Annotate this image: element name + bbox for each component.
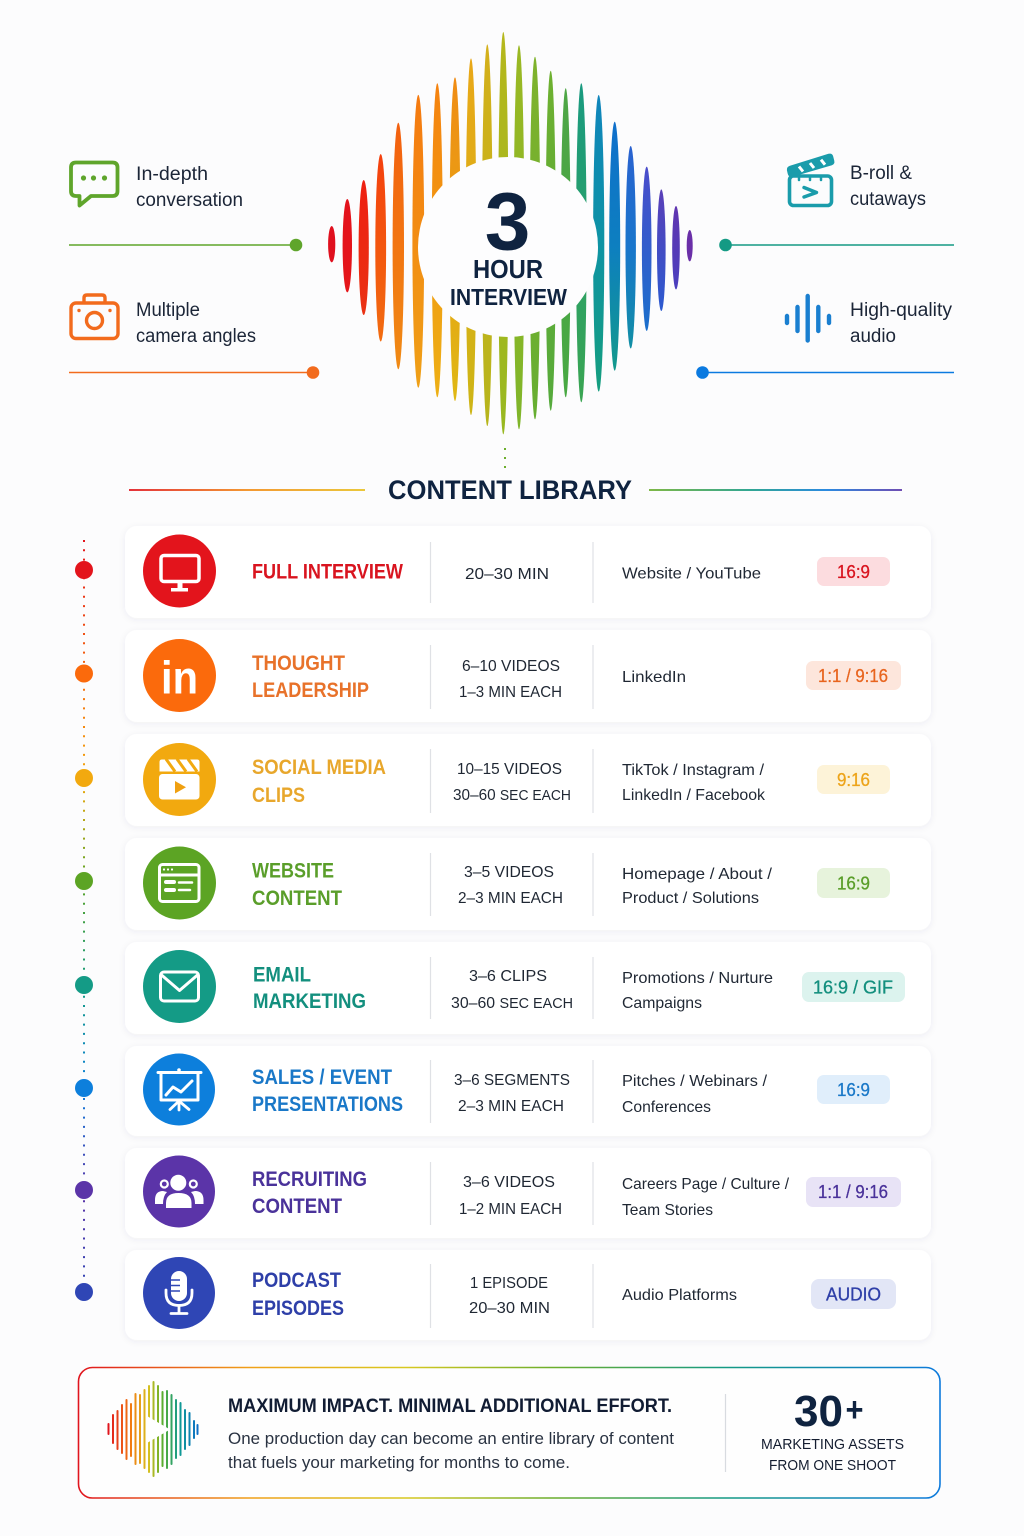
panel: thought leadership — [125, 630, 931, 722]
callout heading: MAXIMUM IMPACT. MINIMAL ADDITIONAL EFFORT. — [228, 1396, 672, 1417]
platforms: Homepage / About / — [622, 866, 773, 883]
ratio pill — [817, 765, 890, 794]
platforms — [622, 1176, 790, 1219]
duration: 30–60 SEC EACH — [451, 995, 573, 1012]
stat: 30+ marketing assets — [761, 1387, 904, 1474]
platforms — [622, 1073, 768, 1116]
icon: audio bars — [787, 296, 829, 340]
ratio pill — [811, 1279, 896, 1309]
duration — [453, 761, 571, 804]
icon: envelope — [143, 950, 216, 1023]
label HOUR: HOUR — [473, 256, 543, 284]
heading: content library: CONTENT LIBRARY — [388, 475, 632, 505]
feature: in-depth conversation — [69, 162, 302, 251]
ratio pill: 9:16 — [837, 770, 870, 790]
ratio pill — [806, 661, 901, 690]
icon: team — [143, 1156, 215, 1228]
platforms — [622, 762, 766, 804]
ratio pill: 16:9 — [837, 1080, 870, 1100]
platforms: LinkedIn — [622, 669, 686, 686]
title — [252, 1168, 367, 1218]
ratio pill — [802, 972, 905, 1002]
platforms: Audio Platforms — [622, 1287, 737, 1304]
panel: sales and event presentations — [125, 1046, 931, 1136]
icon: linkedin: in — [161, 652, 198, 704]
title: THOUGHT — [252, 652, 345, 675]
title: SOCIAL MEDIA — [252, 756, 386, 779]
duration: 30–60 SEC EACH — [453, 787, 571, 804]
ratio pill — [806, 1177, 901, 1207]
ratio pill: 16:9 — [837, 874, 870, 894]
ratio pill: AUDIO — [826, 1284, 881, 1304]
icon: clapper play — [143, 743, 216, 816]
callout body text — [228, 1429, 674, 1472]
icon: monitor — [143, 534, 216, 608]
title: LEADERSHIP — [252, 679, 369, 702]
central waveform with 3 hour interview badge — [328, 32, 693, 434]
text: b-roll and cutaways: cutaways — [850, 189, 926, 210]
duration: 1 EPISODE — [470, 1275, 548, 1292]
title: RECRUITING — [252, 1168, 367, 1191]
panel: website content — [125, 838, 931, 930]
text: in-depth conversation — [136, 164, 243, 211]
ratio pill: 1:1 / 9:16 — [818, 1182, 888, 1202]
connector line orange — [69, 366, 319, 379]
big number 3: 3 — [485, 176, 530, 268]
panel: podcast episodes — [125, 1250, 931, 1340]
title: CONTENT — [252, 1195, 342, 1218]
duration: 20–30 MIN — [465, 566, 549, 583]
title: CONTENT — [252, 887, 342, 910]
duration: 3–6 CLIPS — [469, 968, 547, 985]
icon: clapperboard — [789, 155, 833, 206]
title — [252, 1066, 403, 1116]
panel: email marketing — [125, 942, 931, 1034]
duration: 3–6 VIDEOS — [463, 1174, 555, 1191]
icon: linkedin — [143, 639, 216, 712]
title: PRESENTATIONS — [252, 1093, 403, 1116]
platforms — [622, 970, 773, 1012]
platforms: TikTok / Instagram / — [622, 762, 765, 779]
duration: 3–6 SEGMENTS — [454, 1072, 570, 1089]
callout body text: One production day can become an entire library of content — [228, 1429, 674, 1448]
platforms: Campaigns — [622, 995, 702, 1012]
platforms: Team Stories — [622, 1202, 713, 1219]
icon: presentation board — [143, 1054, 215, 1126]
platforms: Conferences — [622, 1099, 711, 1116]
duration — [469, 1275, 550, 1317]
panel: recruiting content — [125, 1148, 931, 1238]
duration: 2–3 MIN EACH — [458, 1098, 564, 1115]
platforms: Website / YouTube — [622, 566, 761, 582]
ratio pill — [817, 868, 890, 898]
text: in-depth conversation: conversation — [136, 190, 243, 211]
platforms: LinkedIn / Facebook — [622, 787, 766, 804]
title: WEBSITE — [252, 860, 334, 882]
title — [252, 1269, 344, 1320]
duration — [459, 1174, 562, 1218]
duration — [459, 658, 562, 701]
title: MARKETING — [253, 990, 366, 1013]
connector line blue — [696, 366, 954, 379]
text: high-quality audio — [850, 300, 953, 347]
text: multiple camera angles — [136, 300, 256, 347]
stat: 30+ marketing assets: + — [846, 1391, 864, 1429]
text: in-depth conversation: In-depth — [136, 164, 208, 185]
title — [253, 964, 366, 1013]
title: EMAIL — [253, 964, 311, 986]
duration: 20–30 MIN — [469, 1300, 550, 1317]
title: SALES / EVENT — [252, 1066, 392, 1089]
title: PODCAST — [252, 1269, 341, 1292]
duration — [451, 968, 573, 1012]
stat: 30+ marketing assets: 30 — [794, 1387, 843, 1436]
title: FULL INTERVIEW — [252, 560, 403, 584]
title: EPISODES — [252, 1297, 344, 1320]
text: b-roll and cutaways: B-roll & — [850, 163, 912, 184]
white center circle — [418, 157, 598, 337]
icon: mini waveform with play — [108, 1382, 198, 1476]
stat: 30+ marketing assets: FROM ONE SHOOT — [769, 1457, 896, 1474]
panel: summary callout — [78, 1368, 940, 1498]
text: b-roll and cutaways — [850, 163, 926, 210]
feature: high-quality audio — [696, 296, 954, 379]
icon: speech bubble — [71, 162, 118, 206]
duration: 2–3 MIN EACH — [458, 890, 563, 907]
title — [252, 652, 369, 702]
title — [252, 756, 386, 807]
connector line teal — [719, 239, 954, 251]
duration: 3–5 VIDEOS — [464, 864, 554, 881]
ratio pill: 16:9 — [837, 562, 870, 582]
duration: 1–3 MIN EACH — [459, 684, 562, 701]
platforms — [622, 866, 773, 907]
duration — [454, 1072, 570, 1115]
feature: multiple camera angles — [69, 295, 319, 379]
icon: camera — [71, 295, 118, 338]
ratio pill — [817, 557, 890, 586]
timeline with colored dots — [75, 540, 93, 1301]
panel: social media clips — [125, 734, 931, 826]
ratio pill: 1:1 / 9:16 — [818, 666, 888, 686]
ratio pill — [817, 1075, 890, 1104]
feature: b-roll and cutaways — [719, 155, 954, 251]
platforms: Careers Page / Culture / — [622, 1176, 790, 1193]
duration: 1–2 MIN EACH — [459, 1201, 562, 1218]
icon: website window — [143, 846, 216, 920]
ratio pill: 16:9 / GIF — [813, 978, 893, 998]
title — [252, 860, 342, 910]
platforms: Product / Solutions — [622, 890, 759, 907]
panel: full interview — [125, 526, 931, 618]
label INTERVIEW: INTERVIEW — [450, 284, 568, 310]
title: CLIPS — [252, 784, 305, 807]
stat: 30+ marketing assets: MARKETING ASSETS — [761, 1436, 904, 1453]
platforms: Pitches / Webinars / — [622, 1073, 768, 1090]
callout body text: that fuels your marketing for months to come. — [228, 1453, 570, 1472]
platforms: Promotions / Nurture — [622, 970, 773, 987]
waveform bars — [328, 32, 693, 434]
duration: 6–10 VIDEOS — [462, 658, 560, 675]
connector line green — [69, 239, 302, 251]
duration — [458, 864, 563, 907]
text: multiple camera angles: Multiple — [136, 300, 200, 321]
icon: microphone — [143, 1257, 215, 1329]
text: high-quality audio: High-quality — [850, 300, 953, 321]
duration: 10–15 VIDEOS — [457, 761, 562, 778]
text: high-quality audio: audio — [850, 326, 896, 347]
text: multiple camera angles: camera angles — [136, 326, 256, 347]
